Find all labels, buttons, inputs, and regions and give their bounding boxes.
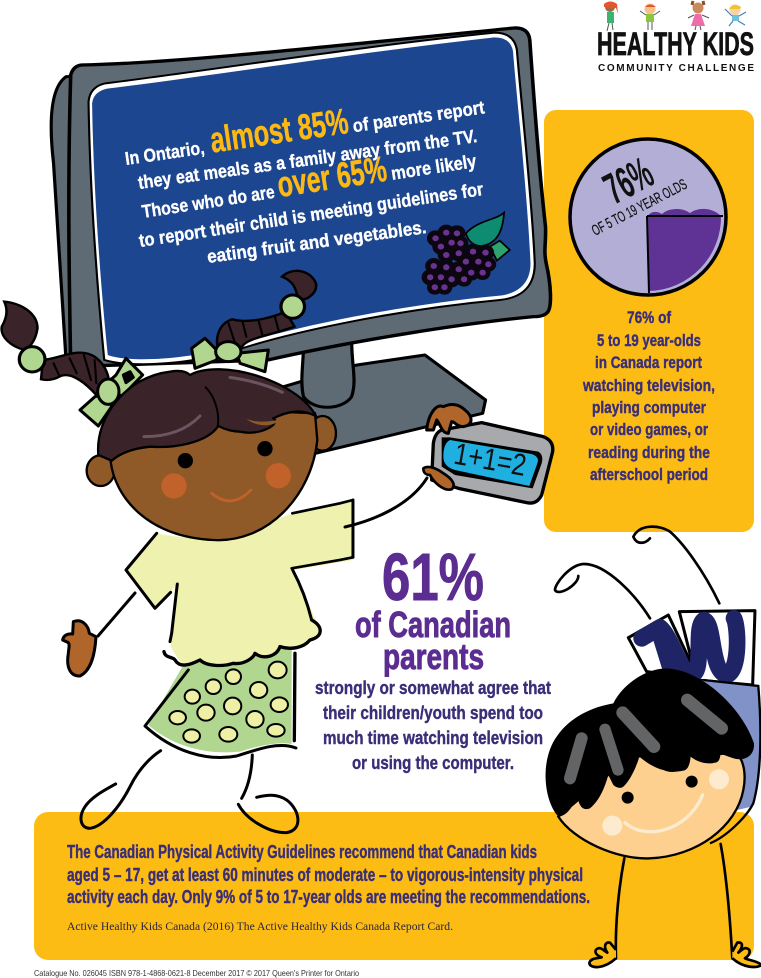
text: guidelines [67,842,590,907]
pie chart: 76 percent: 76% [596,148,661,214]
monitor stand base [250,355,486,463]
screen text: Ontario family meals: more likely [390,150,478,184]
text: parents agree description: strongly or somewhat agree that [315,678,551,698]
text: 61 percent of Canadian parents: parents [383,636,484,677]
text: 76 percent description: in Canada report [595,353,702,372]
text: guidelines: The Canadian Physical Activity Guidelines recommend that Canadian kids [67,842,537,862]
pie chart: 76 percent [570,139,726,295]
screen text: Ontario family meals: Those who do are [140,181,276,222]
girl character [63,338,553,833]
eyes [178,441,273,468]
text: 61 percent of Canadian parents: 61% [382,540,484,615]
text: 61 percent of Canadian parents: of Canadian [355,604,511,645]
icon: four small kids [604,1,746,31]
screen text: Ontario family meals: of parents report [351,96,486,136]
text: parents agree description: much time watching television [323,728,543,748]
text: 76 percent description: 76% of [627,308,671,327]
screen text: Ontario family meals: they eat meals as a family away from the TV. [137,125,478,193]
text: guidelines: aged 5 – 17, get at least 60 minutes of moderate – to vigorous-intensity physical [67,865,583,885]
logo: Healthy Kids Community Challenge [597,1,754,74]
text: 61 percent of Canadian parents [315,540,551,773]
girl skirt with dots [145,643,296,758]
screen text: Ontario family meals [121,81,486,267]
monitor side panel [51,77,86,360]
text: source citation: Active Healthy Kids Canada (2016) The Active Healthy Kids Canada Report Card. [67,921,453,933]
phone equation: 1+1=2 [451,437,529,483]
computer monitor [51,28,550,463]
boy arms [616,844,732,958]
text: 76 percent description: afterschool period [590,465,708,484]
right pigtail [282,271,316,300]
hair [98,369,316,461]
text: parents agree description [315,678,551,773]
boy cheeks [602,769,729,836]
boy face [558,753,745,858]
girl arms [98,478,427,636]
icon: blackberries [422,213,510,295]
text: 76 percent description: 5 to 19 year-olds [597,331,701,350]
screen text: Ontario family meals: over 65% [274,148,389,205]
monitor neck [302,340,354,407]
boy character doing handstand [546,527,761,967]
ears [87,416,336,486]
boy hair [546,668,754,817]
girl legs [81,751,298,833]
panel: right yellow stat [544,110,754,532]
boy eyes [622,776,698,804]
girl fingers [427,404,471,433]
text: parents agree description: or using the computer. [352,753,514,773]
boy hair highlights [570,700,722,778]
text: 76 percent description: playing computer [592,398,706,417]
screen text: Ontario family meals: eating fruit and vegetables. [206,216,427,267]
girl hair bows [80,338,268,426]
phone with 1+1=2 [423,404,553,503]
footer catalogue line: Catalogue No. 026045 ISBN 978-1-4868-0621-8 December 2017 © 2017 Queen's Printer for Ontario [34,968,359,978]
monitor frame [69,28,550,367]
logo: Healthy Kids Community Challenge: COMMUNITY CHALLENGE [598,63,754,74]
cheeks [161,463,291,499]
text: 76 percent description: reading during the [588,443,710,462]
screen text: Ontario family meals: to report their child is meeting guidelines for [137,178,485,251]
monitor screen [92,37,531,359]
boy legs [555,527,719,618]
text: parents agree description: their children/youth spend too [323,703,543,723]
girl pigtails [2,271,316,398]
boy smile [625,795,703,832]
text: guidelines: activity each day. Only 9% of 5 to 17-year olds are meeting the recommendations. [67,887,590,907]
screen text: Ontario family meals: In Ontario, [124,137,206,169]
smile [212,490,251,501]
boy shorts [628,611,755,685]
monitor screen bezel [89,33,535,364]
phone body [432,423,553,503]
phone screen [442,437,542,488]
text: 76 percent description [582,308,715,484]
text: 76 percent description: or video games, or [590,420,708,439]
pie chart: 76 percent: OF 5 TO 19 YEAR OLDS [589,176,690,240]
screen text: Ontario family meals: almost 85% [207,100,351,161]
girl head [87,369,336,540]
face [111,407,317,540]
hair highlights [144,377,282,437]
boy shirt [698,680,761,812]
girl shirt [126,500,353,665]
boy hands [589,942,761,967]
left pigtail [2,302,37,350]
panel: bottom yellow guidelines [34,812,754,960]
girl left hand [63,621,96,676]
text: 76 percent description: watching television, [582,376,715,395]
